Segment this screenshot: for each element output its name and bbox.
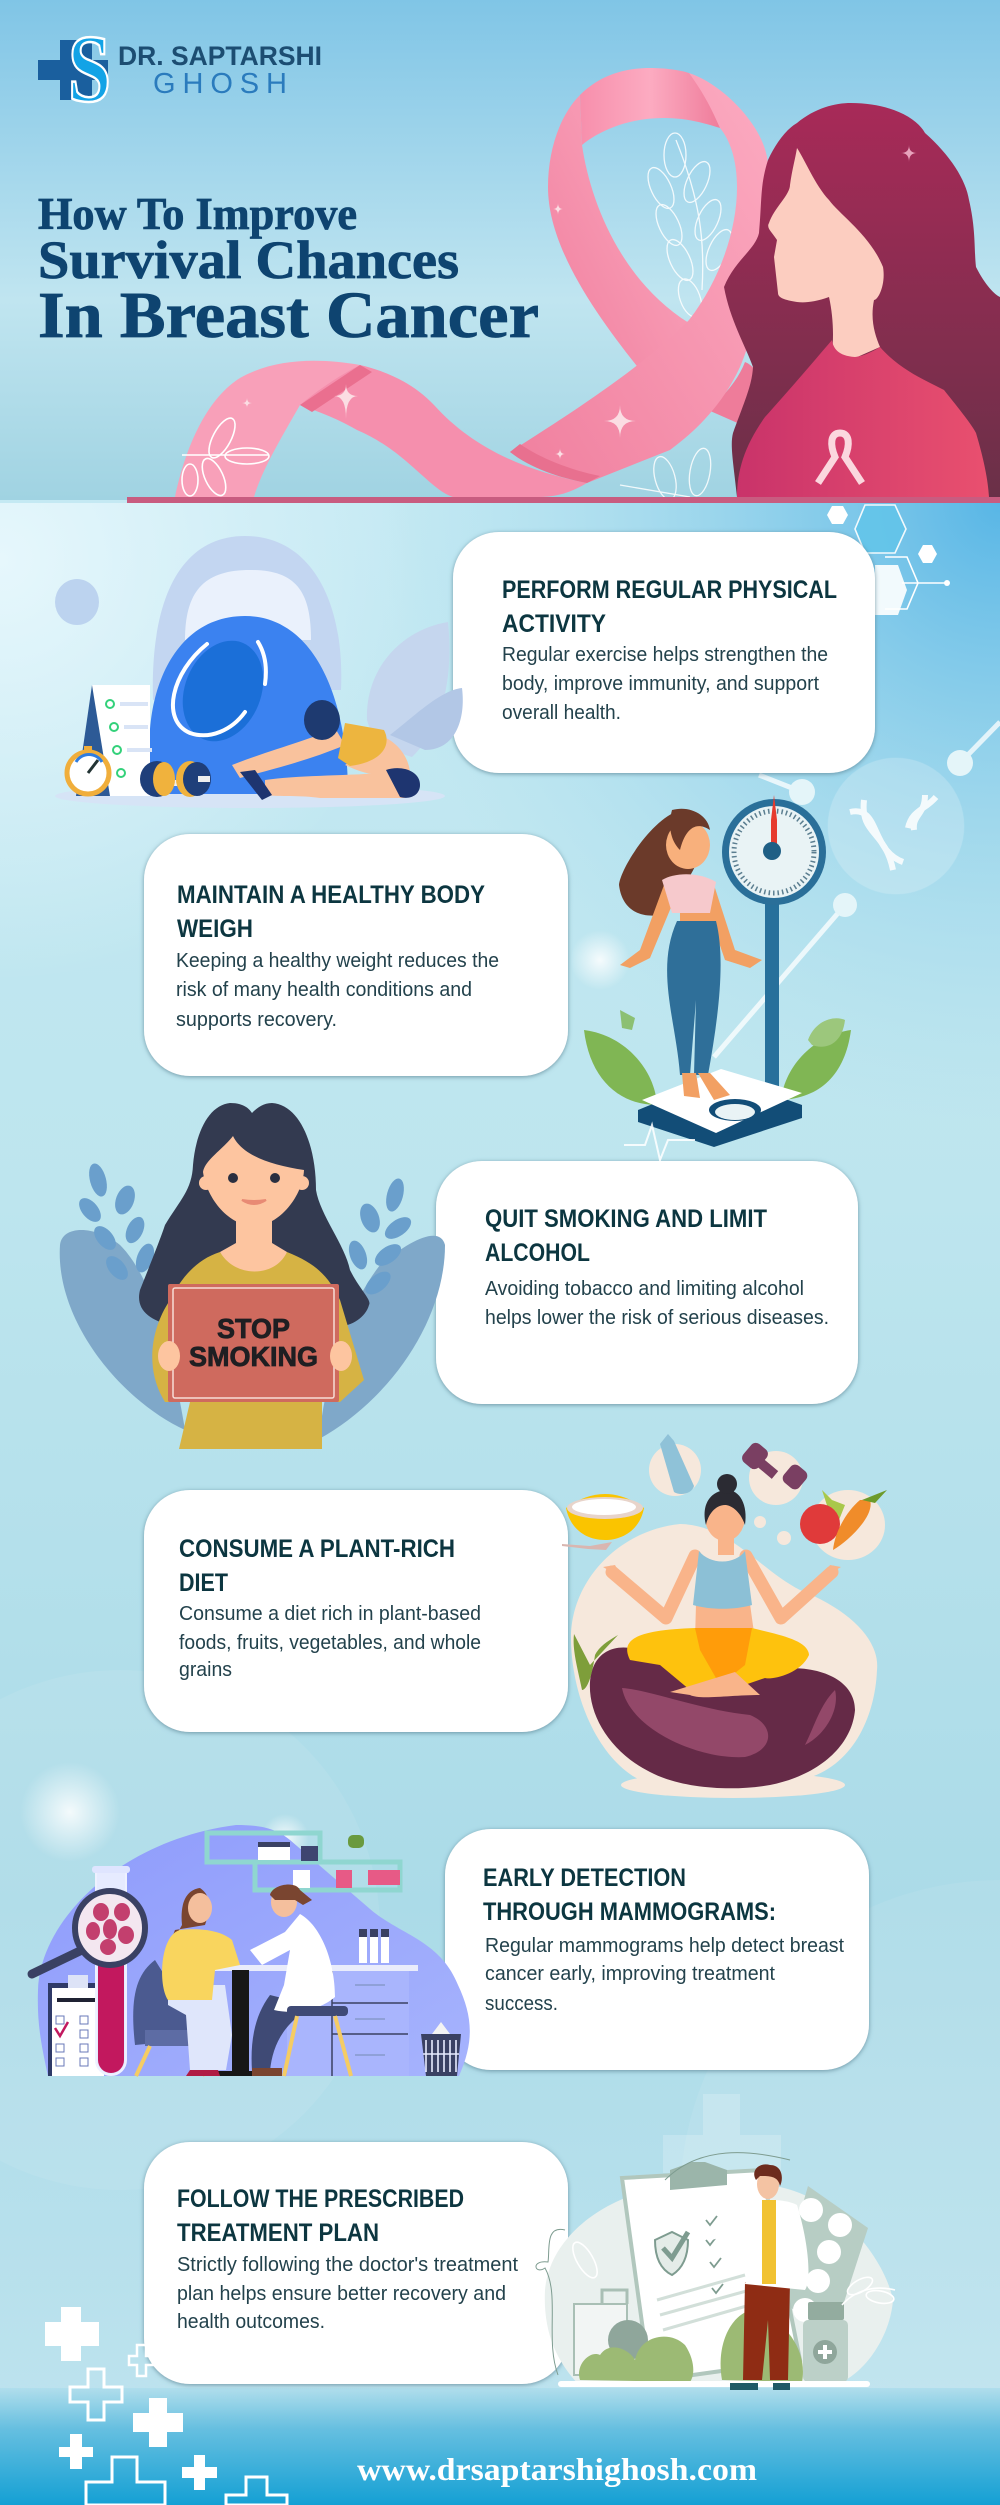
panel: plant-rich diet: grains bbox=[179, 1659, 232, 1681]
pale blob bbox=[545, 2187, 893, 2386]
title: Survival Chances bbox=[38, 230, 459, 290]
faint medical cross bbox=[663, 2094, 781, 2173]
leaf outlines bbox=[568, 2239, 895, 2305]
pill bottle bbox=[803, 2302, 848, 2382]
illustration: woman holding stop smoking sign bbox=[60, 1103, 445, 1449]
illustration: doctor with treatment plan bbox=[536, 2094, 895, 2390]
logo: DR. SAPTARSHI bbox=[118, 41, 322, 71]
pole bbox=[765, 900, 779, 1090]
stopwatch bbox=[67, 746, 109, 794]
panel: early detection: Regular mammograms help detect breast bbox=[485, 1935, 844, 1957]
logo bbox=[38, 15, 322, 122]
heartbeat line bbox=[624, 1125, 695, 1160]
panel: early detection: success. bbox=[485, 1993, 558, 2015]
panel: plant-rich diet bbox=[144, 1490, 568, 1732]
molecule and DNA decoration bbox=[714, 505, 1000, 1057]
dumbbell bbox=[740, 1440, 810, 1492]
checklist bbox=[76, 685, 152, 796]
midriff bbox=[695, 1604, 755, 1640]
illustration: laboratory blood test bbox=[32, 1825, 470, 2076]
medical kit and bushes bbox=[574, 2290, 803, 2382]
standing woman bbox=[619, 809, 762, 1100]
kettlebell handle bbox=[153, 536, 341, 700]
shirt bbox=[737, 340, 989, 497]
hexagons bbox=[855, 505, 947, 609]
test tube and magnifier bbox=[32, 1866, 145, 2075]
logo: GHOSH bbox=[153, 68, 287, 100]
panel: regular physical activity: Regular exercise helps strengthen the bbox=[502, 644, 828, 666]
doctor bbox=[250, 1885, 351, 2076]
ribbon left arch bbox=[175, 361, 360, 497]
ribbon leaf outlines bbox=[182, 414, 269, 499]
illustration: woman on eggplant balancing healthy items bbox=[562, 1434, 887, 1798]
panel: early detection: cancer early, improving treatment bbox=[485, 1963, 775, 1985]
panel: plant-rich diet: Consume a diet rich in plant-based bbox=[179, 1603, 481, 1625]
panel: early detection: THROUGH MAMMOGRAMS: bbox=[483, 1898, 776, 1926]
panel: healthy body weight: risk of many health conditions and bbox=[176, 979, 472, 1001]
panel: regular physical activity: overall health. bbox=[502, 702, 621, 724]
cabinet bbox=[287, 1970, 409, 2076]
pink ribbon bbox=[175, 68, 768, 499]
stretching woman bbox=[232, 700, 420, 800]
header background bbox=[0, 0, 1000, 500]
illustration: woman stretching by kettlebell bbox=[55, 536, 463, 808]
panel: plant-rich diet: foods, fruits, vegetables, and whole bbox=[179, 1632, 481, 1654]
shirt bbox=[152, 1252, 364, 1449]
bottle bbox=[660, 1434, 694, 1494]
panel: healthy body weight: WEIGH bbox=[177, 915, 253, 943]
leaves bbox=[584, 1030, 657, 1105]
background leaves bbox=[60, 1230, 185, 1430]
pink baseline bar bbox=[127, 497, 1000, 503]
dumbbell bbox=[140, 761, 211, 797]
panel: quit smoking and limit alcohol: ALCOHOL bbox=[485, 1239, 590, 1267]
table bbox=[193, 1965, 418, 1971]
panel: quit smoking and limit alcohol bbox=[436, 1161, 858, 1404]
medical crosses bbox=[45, 2307, 287, 2505]
panel: healthy body weight: supports recovery. bbox=[176, 1009, 337, 1031]
ribbon top fold bbox=[580, 68, 720, 145]
hair bbox=[724, 103, 1000, 497]
panel: early detection bbox=[445, 1829, 869, 2070]
top bbox=[693, 1551, 752, 1609]
ground line bbox=[558, 2381, 870, 2387]
patient bbox=[133, 1888, 240, 2076]
panel: follow treatment plan: Strictly following the doctor's treatment bbox=[177, 2254, 518, 2276]
decorative leaf outlines bbox=[620, 133, 737, 502]
panel: healthy body weight: Keeping a healthy weight reduces the bbox=[176, 950, 499, 972]
waste basket bbox=[421, 2022, 461, 2076]
sprigs bbox=[75, 1162, 415, 1299]
shelves bbox=[207, 1833, 400, 1890]
sign bbox=[168, 1284, 339, 1402]
leaves bbox=[367, 622, 449, 757]
panel: quit smoking and limit alcohol: Avoiding tobacco and limiting alcohol bbox=[485, 1278, 804, 1300]
dial bbox=[722, 795, 826, 905]
panel: regular physical activity: PERFORM REGULAR PHYSICAL bbox=[502, 576, 837, 604]
panel: follow treatment plan: TREATMENT PLAN bbox=[177, 2219, 379, 2247]
panel: follow treatment plan: plan helps ensure better recovery and bbox=[177, 2283, 506, 2305]
neck and chest bbox=[220, 1215, 287, 1272]
panel: healthy body weight bbox=[144, 834, 568, 1076]
woman in profile bbox=[724, 103, 1000, 497]
doctor bbox=[700, 2164, 808, 2390]
test tubes bbox=[359, 1929, 389, 1963]
header banner bbox=[0, 0, 1000, 503]
eggplant bbox=[590, 1647, 855, 1788]
lilac blob bbox=[38, 1825, 470, 2076]
arms bbox=[612, 1556, 832, 1618]
small circle bbox=[55, 579, 99, 625]
panel: plant-rich diet: CONSUME A PLANT-RICH bbox=[179, 1535, 455, 1563]
bubbles behind items bbox=[649, 1444, 885, 1560]
sign: SMOKING bbox=[189, 1341, 318, 1372]
seated woman bbox=[603, 1474, 841, 1697]
kettlebell body bbox=[149, 616, 348, 794]
ribbon sparkles bbox=[242, 203, 636, 460]
ribbon falling strand bbox=[300, 365, 587, 497]
panel: regular physical activity bbox=[453, 532, 875, 773]
blister pack bbox=[775, 2186, 868, 2330]
illustration: woman on weighing scale bbox=[584, 795, 851, 1160]
hands bbox=[158, 1341, 180, 1371]
title: In Breast Cancer bbox=[38, 279, 539, 352]
title: How To Improve bbox=[38, 189, 357, 239]
base bbox=[638, 1069, 802, 1147]
cream blob bbox=[571, 1524, 877, 1780]
bowl bbox=[562, 1494, 644, 1550]
panel: regular physical activity: body, improve immunity, and support bbox=[502, 673, 819, 695]
clipboard bbox=[48, 1975, 104, 2076]
panel: quit smoking and limit alcohol: QUIT SMOKING AND LIMIT bbox=[485, 1205, 767, 1233]
panel: follow treatment plan: FOLLOW THE PRESCRIBED bbox=[177, 2185, 464, 2213]
ribbon badge bbox=[818, 433, 862, 483]
logo: S bbox=[68, 15, 111, 122]
clipboard bbox=[622, 2162, 800, 2381]
fruit and carrot bbox=[800, 1490, 887, 1550]
panel: quit smoking and limit alcohol: helps lower the risk of serious diseases. bbox=[485, 1307, 829, 1329]
panel: healthy body weight: MAINTAIN A HEALTHY BODY bbox=[177, 881, 485, 909]
face bbox=[203, 1136, 304, 1226]
hair bbox=[139, 1103, 369, 1326]
face and neck bbox=[768, 148, 884, 358]
panel: regular physical activity: ACTIVITY bbox=[502, 610, 606, 638]
DNA bubble bbox=[828, 758, 964, 894]
panel: plant-rich diet: DIET bbox=[179, 1569, 228, 1597]
hair sparkle bbox=[901, 145, 917, 162]
ground bbox=[55, 784, 445, 808]
panel: follow treatment plan: health outcomes. bbox=[177, 2311, 325, 2333]
pants bbox=[627, 1628, 809, 1690]
squiggle outline bbox=[536, 2153, 790, 2375]
sign: STOP bbox=[217, 1313, 290, 1344]
panel: early detection: EARLY DETECTION bbox=[483, 1864, 686, 1892]
ribbon back tail bbox=[708, 362, 761, 432]
website url: www.drsaptarshighosh.com bbox=[357, 2451, 757, 2487]
molecule lines and nodes bbox=[714, 722, 1000, 1057]
footer band bbox=[0, 2388, 1000, 2505]
title bbox=[38, 189, 539, 352]
panel: follow treatment plan bbox=[144, 2142, 568, 2384]
ribbon left loop bbox=[548, 95, 689, 375]
ribbon rising strand bbox=[510, 73, 768, 483]
